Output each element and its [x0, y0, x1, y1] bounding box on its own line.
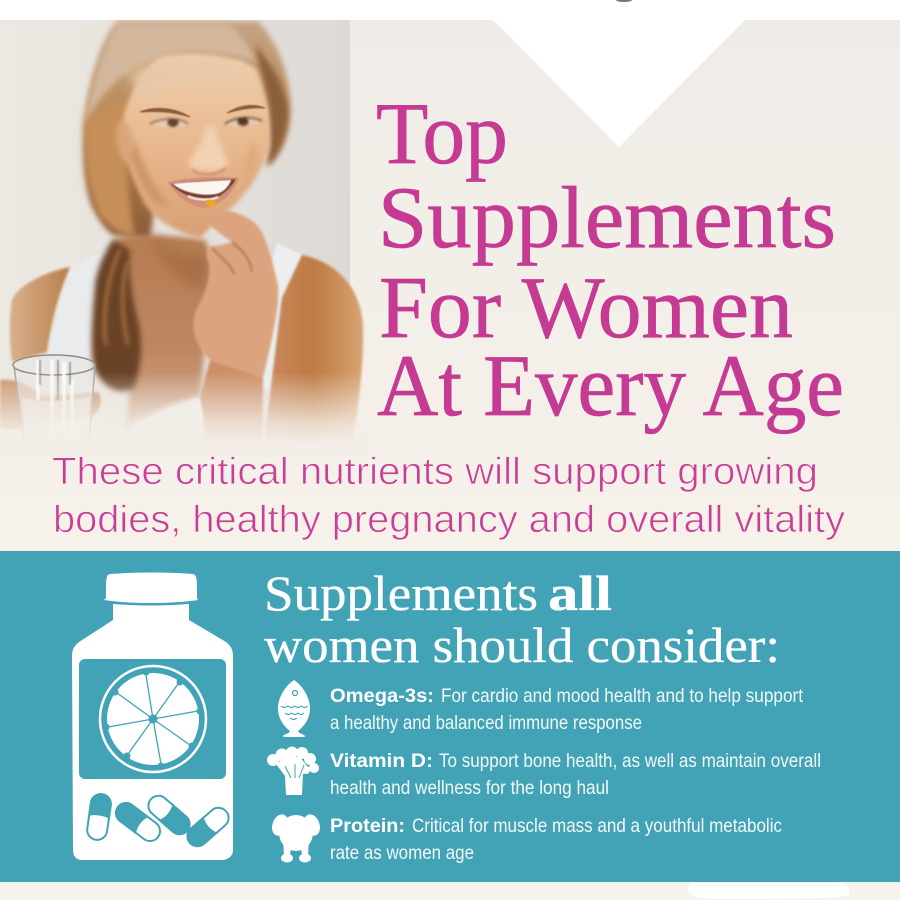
smudge at top edge	[616, 0, 632, 2]
bottom fade	[0, 372, 368, 444]
glass of water and left hand	[0, 355, 101, 442]
title: At Every Age	[377, 338, 844, 435]
photo: smiling woman taking a supplement with a glass of water	[0, 20, 368, 457]
heading: Supplements	[264, 565, 538, 621]
smile	[168, 177, 239, 208]
heading: all	[548, 565, 612, 621]
list: omega-3s: Omega-3s:	[330, 685, 434, 707]
list: vitamin D: To support bone health, as well as maintain overall	[439, 750, 821, 772]
list: vitamin D: health and wellness for the long haul	[330, 777, 609, 799]
list: protein: Critical for muscle mass and a youthful metabolic	[412, 815, 782, 837]
braid	[92, 240, 141, 391]
pills	[86, 792, 233, 850]
icon: broccoli	[267, 746, 319, 795]
footer white patch	[688, 883, 850, 899]
hand holding capsule	[194, 209, 278, 445]
shoulders and chest	[10, 232, 363, 445]
title: Supplements	[378, 170, 836, 267]
title	[376, 86, 844, 435]
title: For Women	[379, 260, 793, 357]
list: omega-3s	[330, 685, 804, 734]
list: vitamin D	[330, 750, 821, 799]
eyebrows	[140, 106, 265, 117]
list: omega-3s: a healthy and balanced immune response	[330, 712, 642, 734]
heading	[264, 565, 780, 673]
white tank top	[48, 243, 302, 406]
supplement capsule	[206, 200, 216, 206]
footer strip	[0, 882, 900, 900]
list: omega-3s: For cardio and mood health and to help support	[441, 685, 804, 707]
list: protein	[330, 815, 782, 864]
eyes	[150, 118, 262, 127]
face	[122, 54, 270, 238]
list: vitamin D: Vitamin D:	[330, 750, 433, 772]
subtitle: These critical nutrients will support growing	[52, 451, 818, 493]
hair	[83, 21, 290, 240]
nose	[188, 125, 228, 171]
subtitle	[52, 451, 845, 541]
heading: women should consider:	[264, 617, 780, 673]
title: Top	[376, 86, 508, 183]
icon: fish	[278, 680, 310, 737]
list: protein: Protein:	[330, 815, 405, 837]
citrus slice	[100, 666, 206, 772]
icon: roast chicken	[269, 812, 323, 862]
icon: supplement bottle	[72, 572, 233, 860]
panel: supplements all women should consider	[0, 551, 900, 900]
paper header background with notch	[0, 20, 900, 551]
list: protein: rate as women age	[330, 842, 474, 864]
subtitle: bodies, healthy pregnancy and overall vitality	[53, 499, 845, 541]
